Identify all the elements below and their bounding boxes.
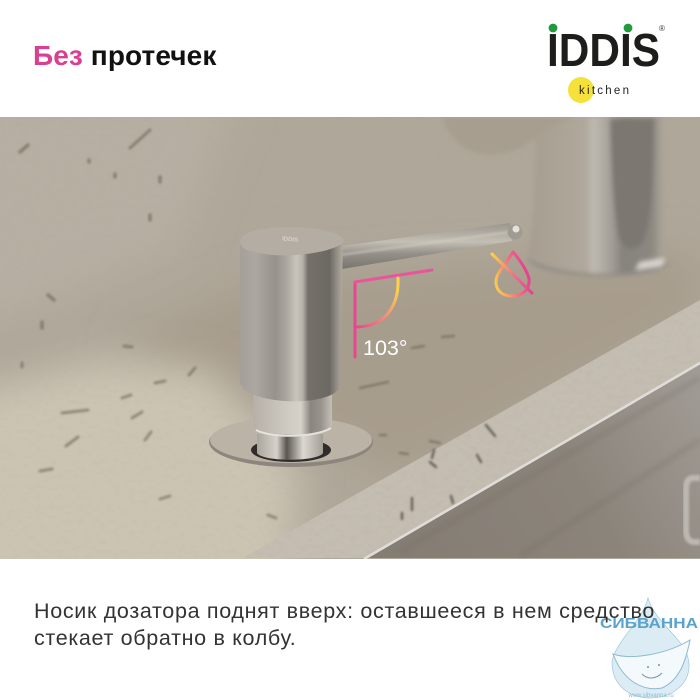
- stone pits: [20, 130, 454, 518]
- soap dispenser: [209, 223, 522, 467]
- logo wordmark: IDDIS: [547, 24, 660, 76]
- watermark url: www.sibvanna.ru: [627, 693, 674, 699]
- base plate: [209, 417, 373, 467]
- description text: Носик дозатора поднят вверх: оставшееся в нем средство: [34, 599, 655, 623]
- logo: iddis kitchen: [547, 24, 665, 103]
- lower stem: [257, 434, 323, 460]
- faucet in the background: [442, 117, 670, 276]
- plate hole: [251, 438, 331, 462]
- description text: стекает обратно в колбу.: [34, 626, 296, 650]
- watermark: Sibvanna: [600, 596, 698, 699]
- icon: crossed-out drop: [492, 252, 532, 296]
- angle diagram: [355, 270, 432, 357]
- logo kitchen badge: kitchen: [579, 85, 629, 97]
- top cap: [240, 227, 344, 255]
- stone front edge: [243, 300, 700, 558]
- angle label 103°: 103°: [363, 336, 407, 360]
- logo wordmark: ®: [659, 24, 665, 33]
- description text: [34, 599, 655, 650]
- logo kitchen badge: [568, 77, 629, 103]
- product photo: dispenser on stone countertop: [0, 117, 700, 559]
- cap logo: IDDIS: [282, 236, 298, 244]
- edge pits: [402, 425, 495, 519]
- neck ring: [256, 428, 331, 436]
- stone foreground: [0, 360, 300, 600]
- stone background: [0, 117, 700, 559]
- steel sink: [367, 363, 700, 558]
- watermark name: СИБВАННА: [600, 615, 698, 632]
- watermark drop and bath: [612, 598, 690, 698]
- body: [240, 240, 343, 401]
- sink drain slot: [686, 478, 700, 542]
- dispenser spout: [334, 223, 522, 270]
- title: Без протечек: [33, 40, 216, 71]
- neck: [253, 395, 332, 435]
